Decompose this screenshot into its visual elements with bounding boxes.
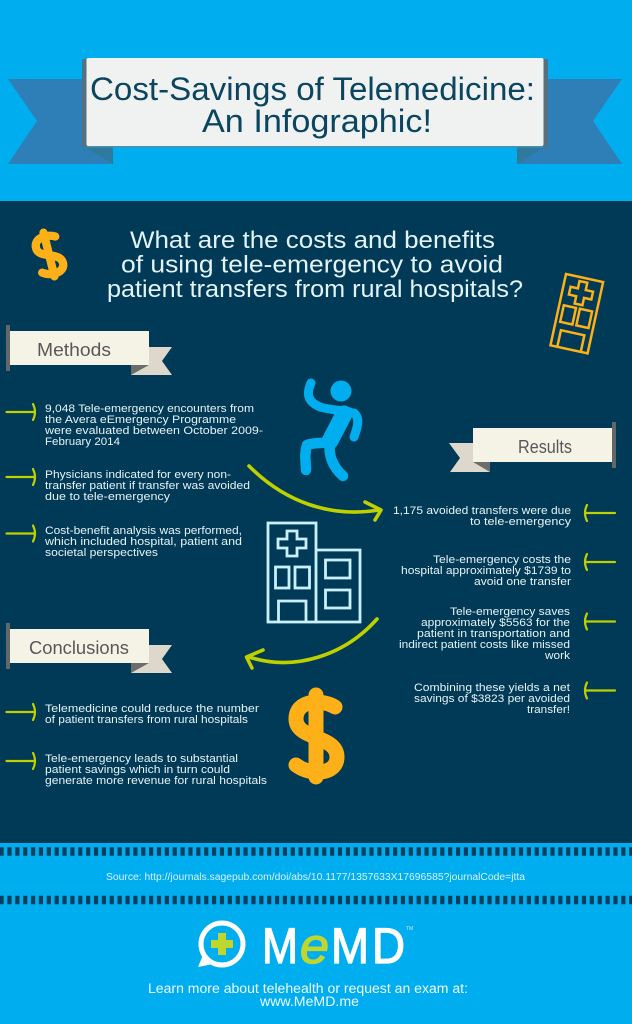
method arrows [6, 404, 35, 542]
methods list [44, 403, 263, 559]
icon: small dollar sign [33, 230, 66, 279]
result 4: savings of $3823 per avoided [414, 693, 570, 705]
result 3 [399, 606, 570, 662]
title text: Cost-Savings of Telemedicine: [90, 71, 535, 107]
conclusion 2: generate more revenue for rural hospitals [45, 775, 267, 787]
conclusion 1: of patient transfers from rural hospitals [45, 714, 248, 726]
source citation: Source: http://journals.sagepub.com/doi/abs/10.1177/1357633X17696585?journalCode=jtta [106, 872, 525, 883]
call to action [148, 981, 468, 1009]
conclusion 1: Telemedicine could reduce the number [45, 703, 259, 715]
method 2 [45, 469, 250, 503]
results ribbon [449, 422, 616, 472]
call to action: Learn more about telehealth or request an exam at: [148, 981, 468, 996]
question heading: What are the costs and benefits [130, 227, 495, 254]
conclusion 1 [45, 703, 259, 726]
method 3: which included hospital, patient and [44, 536, 242, 548]
method 2: transfer patient if transfer was avoided [45, 480, 250, 492]
result 2: hospital approximately $1739 to [401, 565, 571, 577]
result 4 [414, 682, 571, 716]
trademark: TM [406, 926, 413, 932]
method 1: were evaluated between October 2009- [44, 425, 263, 437]
question heading: patient transfers from rural hospitals? [107, 276, 523, 303]
result 2: Tele-emergency costs the [433, 554, 571, 566]
curved arrow to results [249, 466, 381, 520]
result arrows [585, 505, 615, 698]
method 3: Cost-benefit analysis was performed, [45, 525, 242, 537]
result 3: approximately $5563 for the [421, 617, 570, 629]
result 3: indirect patient costs like missed [399, 639, 570, 651]
result 4: Combining these yields a net [414, 682, 571, 694]
icon: speech bubble with plus [198, 923, 243, 967]
result 3: work [544, 650, 570, 662]
call to action: www.MeMD.me [259, 994, 359, 1009]
main dark panel [0, 201, 632, 843]
conclusions list [45, 703, 267, 787]
MeMD logo [198, 918, 413, 974]
method 1: 9,048 Tele-emergency encounters from [45, 403, 254, 415]
title banner [8, 58, 622, 164]
logo wordmark [262, 918, 405, 974]
result 2 [401, 554, 571, 588]
result 2: avoid one transfer [474, 576, 571, 588]
question heading [107, 227, 523, 303]
conclusion 2 [45, 753, 267, 787]
method 1: February 2014 [45, 436, 120, 448]
icon: small tilted hospital [550, 274, 603, 353]
method 2: Physicians indicated for every non- [45, 469, 231, 481]
icon: large dollar sign [296, 695, 337, 777]
conclusion 2: patient savings which in turn could [45, 764, 230, 776]
method 3 [44, 525, 242, 559]
logo wordmark: e [300, 918, 329, 974]
conclusions heading: Conclusions [29, 638, 129, 658]
results list [393, 505, 571, 716]
result 1 [393, 505, 571, 528]
result 1: to tele-emergency [470, 516, 571, 528]
logo wordmark: M [262, 918, 298, 974]
title text: An Infographic! [202, 103, 432, 139]
result 3: patient in transportation and [417, 628, 570, 640]
conclusion 2: Tele-emergency leads to substantial [45, 753, 238, 765]
results heading: Results [518, 437, 572, 457]
method 3: societal perspectives [45, 547, 158, 559]
logo wordmark: M [331, 918, 369, 974]
curved arrow to conclusions [246, 619, 377, 668]
method 1: the Avera eEmergency Programme [45, 414, 236, 426]
title text [90, 71, 535, 139]
conclusion arrows [6, 704, 35, 769]
methods ribbon [6, 325, 172, 375]
icon: blue person [305, 380, 358, 476]
result 4: transfer! [527, 704, 570, 716]
logo wordmark: D [372, 918, 405, 974]
result 3: Tele-emergency saves [450, 606, 570, 618]
result 1: 1,175 avoided transfers were due [393, 505, 571, 517]
icon: large hospital [268, 523, 360, 622]
method 1 [44, 403, 263, 448]
methods heading: Methods [37, 340, 111, 360]
conclusions ribbon [6, 623, 172, 673]
method 2: due to tele-emergency [45, 491, 170, 503]
question heading: of using tele-emergency to avoid [121, 252, 503, 278]
